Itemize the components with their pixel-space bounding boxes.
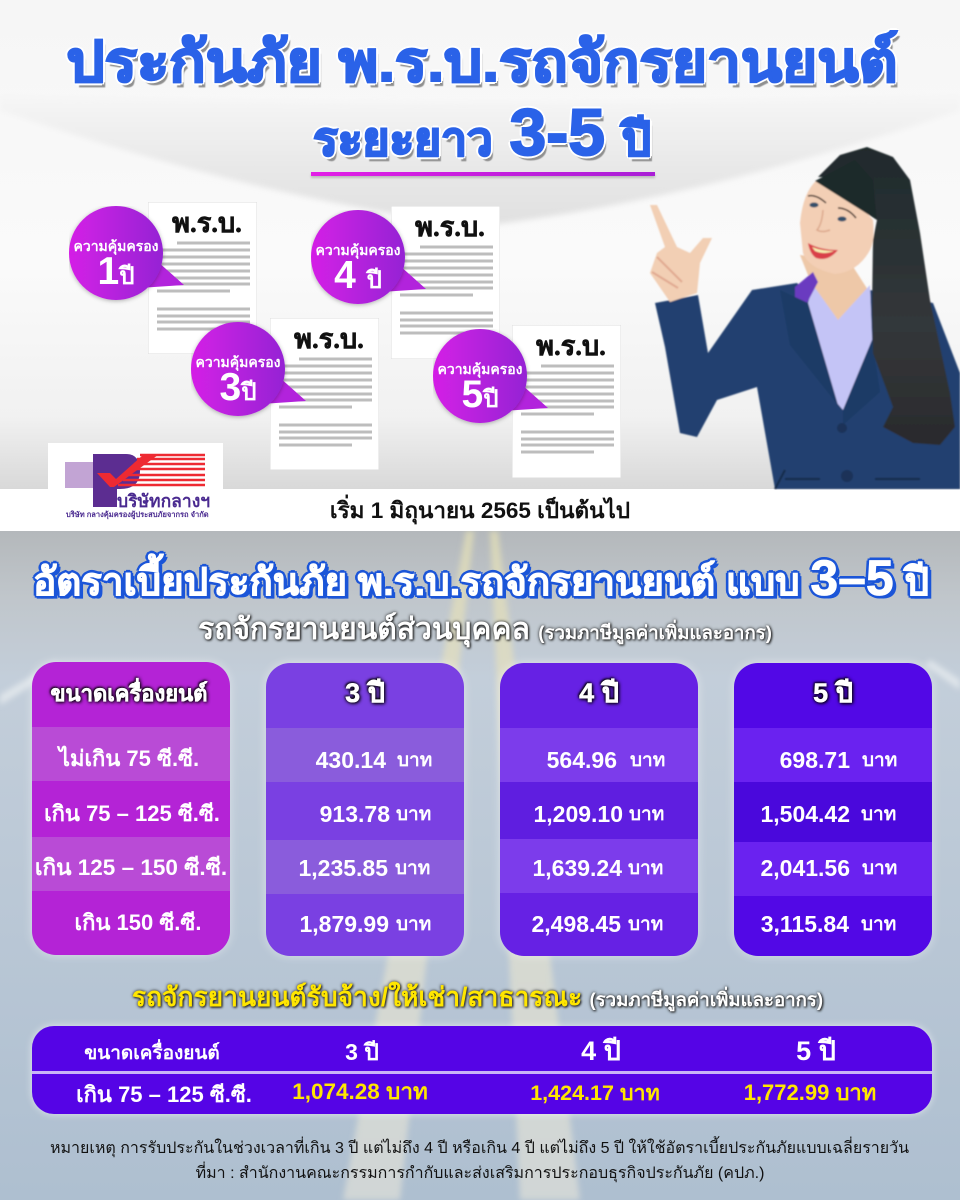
row: 125-150 cc xyxy=(32,837,230,891)
badge label: ความคุ้มครอง xyxy=(195,354,281,370)
header: 3 years: 3 ปี xyxy=(345,1039,379,1065)
person pointing upward xyxy=(650,146,960,490)
divider between header and row xyxy=(32,1071,932,1074)
source: ที่มา : สำนักงานคณะกรรมการกำกับและส่งเสริมการประกอบธุรกิจประกันภัย (คปภ.) xyxy=(196,1165,764,1182)
paper xyxy=(148,202,257,354)
row: 3,115.84: 3,115.84 xyxy=(761,911,849,937)
price: 4 years: 1,424.17 บาท xyxy=(530,1081,660,1105)
row: 2,498.45: บาท xyxy=(628,914,663,935)
paper xyxy=(270,318,379,470)
paper: พ.ร.บ. xyxy=(536,331,606,361)
row: 430.14 xyxy=(266,728,464,782)
row: 1,504.42: บาท xyxy=(861,804,896,825)
start date: เริ่ม 1 มิถุนายน 2565 เป็นต้นไป xyxy=(330,498,630,523)
row: 3,115.84 xyxy=(761,911,896,937)
paper: พ.ร.บ. xyxy=(415,212,485,242)
row: 75-125 cc: เกิน 75 – 125 ซี.ซี. xyxy=(44,801,220,826)
row: 564.96: บาท xyxy=(630,750,665,771)
row: 1,639.24: บาท xyxy=(628,858,663,879)
badge years: 3ปี xyxy=(220,366,256,409)
public motorcycle heading: รถจักรยานยนต์รับจ้าง/ให้เช่า/สาธารณะ (รวมภาษีมูลค่าเพิ่มและอากร) xyxy=(132,982,823,1012)
row: 2,041.56 xyxy=(734,842,932,896)
badge xyxy=(69,206,184,304)
paper: พ.ร.บ. xyxy=(172,208,242,238)
row: 913.78: 913.78 xyxy=(320,801,390,827)
row: 1,504.42 xyxy=(734,782,932,842)
private motorcycle heading: รถจักรยานยนต์ส่วนบุคคล (รวมภาษีมูลค่าเพิ่มและอากร) xyxy=(198,613,772,646)
row: 1,235.85: 1,235.85 xyxy=(298,855,388,881)
badge label: ความคุ้มครอง xyxy=(437,361,523,377)
row: 913.78: บาท xyxy=(396,804,431,825)
badge label: ความคุ้มครอง xyxy=(315,242,401,258)
document 3 years xyxy=(191,318,379,470)
row: 2,498.45 xyxy=(531,911,663,937)
column header: 4 ปี xyxy=(579,678,619,708)
paper: พ.ร.บ. xyxy=(294,324,364,354)
row: 1,879.99: บาท xyxy=(396,914,431,935)
badge years: 1ปี xyxy=(98,250,134,293)
column header: 3 ปี xyxy=(345,678,385,708)
column: engine size xyxy=(32,662,230,955)
row: 1,209.10: 1,209.10 xyxy=(533,801,623,827)
white date band xyxy=(0,489,960,531)
logo name: บริษัทกลางฯ xyxy=(117,491,210,511)
row: 698.71 xyxy=(734,728,932,782)
row: 1,639.24: 1,639.24 xyxy=(532,855,622,881)
row: 1,504.42: 1,504.42 xyxy=(760,801,850,827)
column: 4 years xyxy=(500,663,698,956)
row: 3,115.84: บาท xyxy=(861,914,896,935)
row: 1,209.10: บาท xyxy=(629,804,664,825)
document 1 year xyxy=(69,202,257,354)
badge years: 5ปี xyxy=(462,373,498,416)
header: 5 years: 5 ปี xyxy=(796,1036,836,1066)
subtitle underline xyxy=(311,172,655,176)
row: 430.14: บาท xyxy=(397,750,432,771)
title: ประกันภัย พ.ร.บ.รถจักรยานยนต์ xyxy=(66,30,898,93)
row: 2,498.45: 2,498.45 xyxy=(531,911,621,937)
column header: 5 ปี xyxy=(813,678,853,708)
row: 1,235.85 xyxy=(266,840,464,894)
row: 430.14: 430.14 xyxy=(316,747,386,773)
row: 913.78 xyxy=(320,801,431,827)
row: 1,879.99 xyxy=(299,911,431,937)
paper xyxy=(512,325,621,478)
row: 698.71: บาท xyxy=(862,750,897,771)
logo mark xyxy=(65,454,205,507)
row: over 150 cc: เกิน 150 ซี.ซี. xyxy=(75,910,201,935)
row: 1,879.99: 1,879.99 xyxy=(299,911,389,937)
price: 3 years: 1,074.28 บาท xyxy=(292,1079,428,1104)
column header: ขนาดเครื่องยนต์ xyxy=(51,681,207,706)
row label: 75-125 cc: เกิน 75 – 125 ซี.ซี. xyxy=(76,1082,252,1107)
document 5 years xyxy=(433,325,621,478)
panel: public motorcycle rates xyxy=(32,1026,932,1114)
badge xyxy=(433,329,548,426)
badge years: 4 ปี xyxy=(334,254,382,297)
row: 125-150 cc: เกิน 125 – 150 ซี.ซี. xyxy=(35,855,227,880)
column: 3 years xyxy=(266,663,464,956)
column: 5 years xyxy=(734,663,932,956)
row: up to 75 cc xyxy=(32,727,230,781)
row: 1,639.24 xyxy=(500,839,698,893)
row: 1,235.85: บาท xyxy=(395,858,430,879)
header: 4 years: 4 ปี xyxy=(581,1036,621,1066)
paper xyxy=(391,206,500,359)
row: 2,041.56: บาท xyxy=(862,858,897,879)
badge label: ความคุ้มครอง xyxy=(73,238,159,254)
header: engine size: ขนาดเครื่องยนต์ xyxy=(84,1043,220,1064)
section heading: premium rates: อัตราเบี้ยประกันภัย พ.ร.บ.รถจักรยานยนต์ แบบ 3–5 ปี xyxy=(33,550,929,606)
logo: central insurance company xyxy=(48,443,223,531)
logo full name: บริษัท กลางคุ้มครองผู้ประสบภัยจากรถ จำกัด xyxy=(66,510,209,519)
row: 1,209.10 xyxy=(500,782,698,839)
row: up to 75 cc: ไม่เกิน 75 ซี.ซี. xyxy=(59,746,199,771)
badge xyxy=(191,322,306,420)
footnote: หมายเหตุ การรับประกันในช่วงเวลาที่เกิน 3 ปี แต่ไม่ถึง 4 ปี หรือเกิน 4 ปี แต่ไม่ถึง 5 ปี ให้ใช้อัตราเบี้ยประกันภัยแบบเฉลี่ยรายวัน xyxy=(50,1140,909,1157)
badge xyxy=(311,210,426,308)
row: 564.96 xyxy=(500,728,698,782)
price: 5 years: 1,772.99 บาท xyxy=(744,1080,876,1105)
subtitle: long term 3-5 years: ระยะยาว 3-5 ปี xyxy=(313,95,651,169)
row: 698.71: 698.71 xyxy=(780,747,850,773)
row: 2,041.56: 2,041.56 xyxy=(760,855,850,881)
row: 564.96: 564.96 xyxy=(547,747,617,773)
document 4 years xyxy=(311,206,500,359)
